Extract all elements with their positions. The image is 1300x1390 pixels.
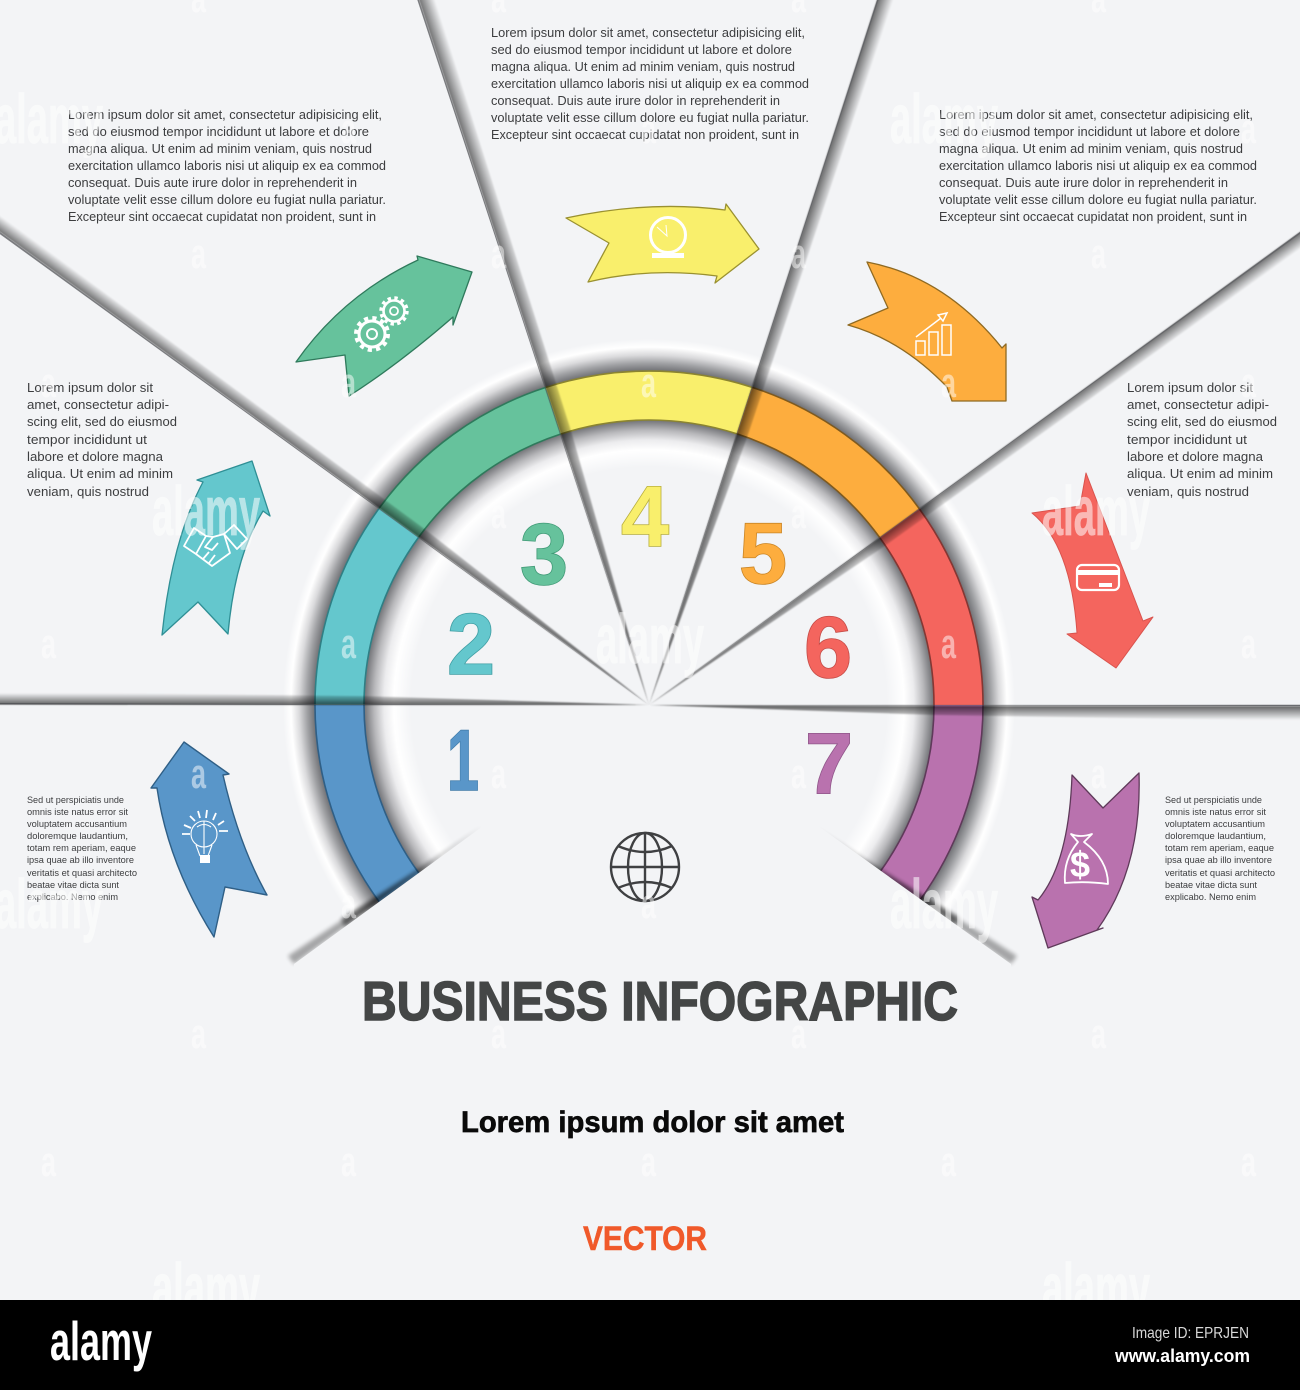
footer image id: Image ID: EPRJEN [1132,1325,1249,1342]
text block: lower left small: voluptatem accusantium [27,819,127,830]
watermark pattern: a [191,1010,206,1057]
text block: top left panel: consequat. Duis aute irure dolor in reprehenderit in [68,175,357,190]
number 2: 2 [447,597,495,693]
text block: middle right: Lorem ipsum dolor sit [1127,380,1253,395]
icon: gears [356,298,407,350]
arrow 6 red [1032,473,1153,668]
text block: lower left small [27,795,137,903]
text block: top centre panel: magna aliqua. Ut enim ad minim veniam, quis nostrud [491,59,795,74]
segmented semicircle ring [315,371,983,902]
text block: top right panel: Excepteur sint occaecat cupidatat non proident, sunt in [939,209,1247,224]
watermark pattern: alamy [152,472,260,550]
bottom title panel [294,705,1011,1300]
footer url: www.alamy.com [1114,1346,1250,1366]
text block: top centre panel: sed do eiusmod tempor incididunt ut labore et dolore [491,42,792,57]
watermark pattern: a [1241,105,1256,152]
text block: middle right: aliqua. Ut enim ad minim [1127,466,1273,481]
icon: money bag: $ [1070,844,1090,885]
text block: top right panel [939,107,1257,224]
icon: money bag [1065,834,1108,885]
text block: top right panel: exercitation ullamco laboris nisi ut aliquip ex ea commod [939,158,1257,173]
text block: middle left: scing elit, sed do eiusmod [27,414,177,429]
text block: lower left small: explicabo. Nemo enim [27,892,118,903]
number 3: 3 [520,507,568,603]
text block: lower right small: omnis iste natus error sit [1165,807,1266,818]
arrow 4 yellow [566,204,759,283]
text block: lower left small: Sed ut perspiciatis unde [27,795,124,806]
watermark pattern: a [641,359,656,406]
text block: top centre panel [491,25,809,142]
watermark pattern: a [641,1138,656,1185]
text block: top left panel [68,107,386,224]
ring shadow halo [283,339,1015,1071]
number 5: 5 [739,506,787,602]
arrow 1 blue [151,742,267,937]
text block: top left panel: magna aliqua. Ut enim ad minim veniam, quis nostrud [68,141,372,156]
ring segment 1 blue [315,705,419,902]
ring segment 3 green [379,387,561,537]
text block: top left panel: Excepteur sint occaecat cupidatat non proident, sunt in [68,209,376,224]
watermark pattern: a [341,1138,356,1185]
text block: top right panel: voluptate velit esse cillum dolore eu fugiat nulla pariatur. [939,192,1257,207]
text block: top left panel: exercitation ullamco laboris nisi ut aliquip ex ea commod [68,158,386,173]
icon: handshake [184,525,247,566]
watermark pattern: a [341,359,356,406]
text block: lower right small: beatae vitae dicta sunt [1165,880,1257,891]
watermark pattern: a [1091,230,1106,277]
text block: top centre panel: exercitation ullamco laboris nisi ut aliquip ex ea commod [491,76,809,91]
text block: lower left small: doloremque laudantium, [27,831,128,842]
ring segment 2 teal [315,508,419,705]
text block: lower left small: omnis iste natus error sit [27,807,128,818]
watermark pattern: a [341,620,356,667]
number 6: 6 [804,600,852,696]
icon: credit card [1077,565,1119,590]
watermark pattern: a [1241,620,1256,667]
watermark pattern: alamy [1042,1249,1150,1327]
text block: lower left small: veritatis et quasi architecto [27,868,137,879]
watermark pattern: alamy [0,865,103,943]
watermark pattern: a [191,750,206,797]
ring segment 4 yellow [546,371,752,434]
footer logo: alamy [50,1310,152,1372]
watermark pattern: a [1241,359,1256,406]
number 7: 7 [805,716,853,812]
arrow 7 purple [1032,773,1139,948]
text block: middle right: amet, consectetur adipi- [1127,397,1269,412]
text block: top centre panel: Lorem ipsum dolor sit amet, consectetur adipisicing elit, [491,25,805,40]
number 1: 1 [447,713,479,809]
text block: top left panel: Lorem ipsum dolor sit amet, consectetur adipisicing elit, [68,107,382,122]
watermark pattern: alamy [890,80,998,158]
watermark pattern: a [341,880,356,927]
watermark pattern: a [791,750,806,797]
text block: lower right small: ipsa quae ab illo inventore [1165,855,1272,866]
text block: lower left small: beatae vitae dicta sunt [27,880,119,891]
watermark pattern: a [941,620,956,667]
text block: lower right small: voluptatem accusantium [1165,819,1265,830]
icon: globe [611,833,679,901]
arrow 2 teal [162,461,270,635]
watermark pattern: a [491,750,506,797]
icon: light bulb [182,810,228,863]
fold shadows between sectors [0,0,1300,964]
text block: top centre panel: Excepteur sint occaecat cupidatat non proident, sunt in [491,127,799,142]
subtitle: Lorem ipsum dolor sit amet [461,1106,844,1139]
icon: clock [650,218,686,258]
text block: top right panel: Lorem ipsum dolor sit amet, consectetur adipisicing elit, [939,107,1253,122]
footer bar [0,1300,1300,1390]
watermark pattern: a [641,105,656,152]
watermark pattern: a [941,1138,956,1185]
text block: lower right small [1165,795,1275,903]
text block: middle left: labore et dolore magna [27,449,164,464]
text block: top right panel: magna aliqua. Ut enim ad minim veniam, quis nostrud [939,141,1243,156]
number 4: 4 [621,469,669,565]
ring segment 6 red [880,509,983,705]
text block: middle left: amet, consectetur adipi- [27,397,169,412]
watermark pattern: a [41,359,56,406]
watermark pattern: a [791,1010,806,1057]
ring segment 7 purple [881,705,983,899]
text block: lower right small: veritatis et quasi architecto [1165,868,1275,879]
watermark pattern: a [341,105,356,152]
text block: middle left: Lorem ipsum dolor sit [27,380,153,395]
text block: top centre panel: voluptate velit esse cillum dolore eu fugiat nulla pariatur. [491,110,809,125]
title: BUSINESS INFOGRAPHIC [362,970,958,1032]
text block: lower left small: totam rem aperiam, eaque [27,843,136,854]
text block: top right panel: consequat. Duis aute irure dolor in reprehenderit in [939,175,1228,190]
watermark pattern: a [1241,1138,1256,1185]
text block: middle left [27,380,177,499]
text block: top left panel: sed do eiusmod tempor incididunt ut labore et dolore [68,124,369,139]
ring segment 5 orange [737,387,919,537]
watermark pattern: alamy [890,865,998,943]
text block: lower right small: doloremque laudantium, [1165,831,1266,842]
watermark pattern: a [491,230,506,277]
text block: lower right small: totam rem aperiam, eaque [1165,843,1274,854]
text block: middle right: veniam, quis nostrud [1127,484,1249,499]
watermark pattern: a [791,230,806,277]
icon: bar chart with arrow [916,313,951,355]
text block: top left panel: voluptate velit esse cillum dolore eu fugiat nulla pariatur. [68,192,386,207]
text block: top centre panel: consequat. Duis aute irure dolor in reprehenderit in [491,93,780,108]
watermark pattern: alamy [152,1249,260,1327]
watermark pattern: a [41,1138,56,1185]
text block: middle right [1127,380,1277,499]
watermark pattern: alamy [596,600,704,678]
watermark pattern: alamy [1042,472,1150,550]
watermark pattern: a [1091,750,1106,797]
watermark pattern: a [1091,1010,1106,1057]
arrow 3 green [296,256,472,396]
watermark pattern: a [791,490,806,537]
text block: middle left: aliqua. Ut enim ad minim [27,466,173,481]
text block: middle right: labore et dolore magna [1127,449,1264,464]
text block: top right panel: sed do eiusmod tempor incididunt ut labore et dolore [939,124,1240,139]
text block: middle right: scing elit, sed do eiusmod [1127,414,1277,429]
text block: middle right: tempor incididunt ut [1127,432,1247,447]
watermark pattern: a [41,620,56,667]
vector label: VECTOR [583,1220,707,1258]
text block: middle left: tempor incididunt ut [27,432,147,447]
arrow 5 orange [848,262,1006,401]
text block: lower right small: Sed ut perspiciatis unde [1165,795,1262,806]
watermark pattern: a [491,1010,506,1057]
watermark pattern: a [191,230,206,277]
text block: lower right small: explicabo. Nemo enim [1165,892,1256,903]
watermark pattern: a [941,359,956,406]
watermark pattern: a [491,490,506,537]
text block: lower left small: ipsa quae ab illo inventore [27,855,134,866]
sector numbers [447,469,853,812]
text block: middle left: veniam, quis nostrud [27,484,149,499]
watermark pattern: a [641,880,656,927]
watermark pattern: alamy [0,80,103,158]
